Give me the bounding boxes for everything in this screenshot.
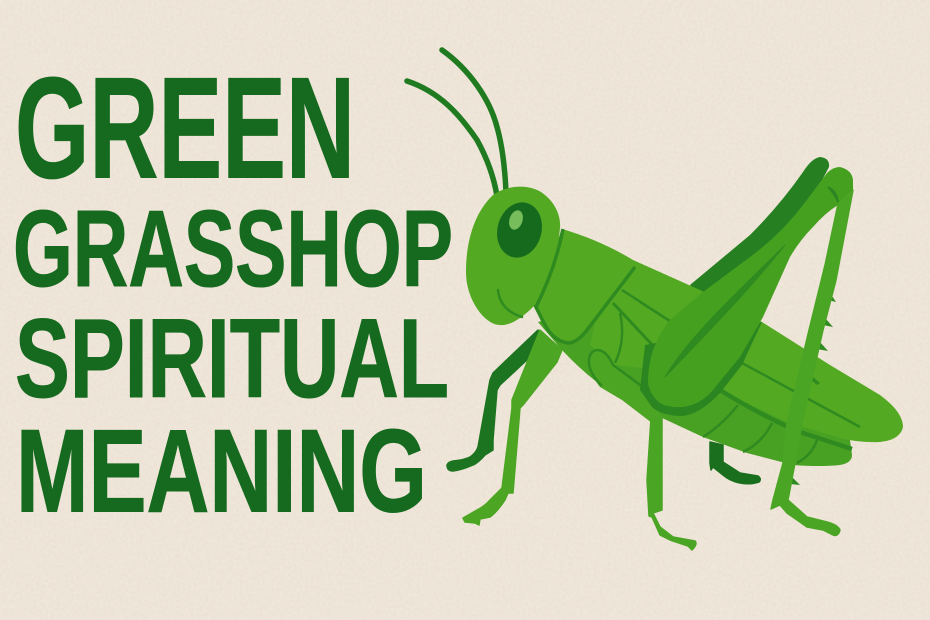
near middle leg bbox=[589, 350, 696, 550]
far hind foot bbox=[710, 442, 760, 484]
eye highlight bbox=[507, 208, 525, 232]
grasshopper illustration bbox=[407, 50, 903, 550]
hind femur bbox=[648, 167, 853, 407]
smile bbox=[498, 290, 522, 317]
antennae bbox=[407, 50, 506, 196]
head bbox=[466, 187, 563, 325]
far hind femur bbox=[690, 157, 829, 300]
hind tibia and foot bbox=[771, 190, 853, 535]
title bbox=[13, 48, 453, 538]
eye bbox=[491, 197, 548, 263]
front antenna bbox=[407, 81, 497, 196]
abdomen bbox=[538, 300, 852, 466]
pronotum bbox=[533, 229, 635, 344]
title line: GREEN: GREEN bbox=[15, 48, 355, 208]
middle femur outline bbox=[589, 350, 650, 392]
femur vein bbox=[665, 245, 785, 377]
middle tibia and foot bbox=[647, 417, 696, 550]
knee mark bbox=[828, 187, 838, 202]
hind leg spines bbox=[790, 293, 836, 485]
title line: GRASSHOP: GRASSHOP bbox=[13, 188, 453, 310]
rear antenna bbox=[442, 50, 506, 192]
middle femur bbox=[590, 351, 662, 423]
near front leg bbox=[463, 330, 562, 525]
pronotum edge bbox=[535, 267, 635, 343]
far front leg bbox=[447, 330, 543, 471]
forewing bbox=[590, 260, 903, 442]
neck line bbox=[536, 229, 563, 307]
title line: SPIRITUAL: SPIRITUAL bbox=[15, 296, 449, 421]
title line: MEANING: MEANING bbox=[16, 406, 427, 538]
hind femur shadow bbox=[640, 322, 762, 416]
wing and abdomen veins bbox=[613, 290, 860, 463]
head shape bbox=[466, 187, 560, 325]
